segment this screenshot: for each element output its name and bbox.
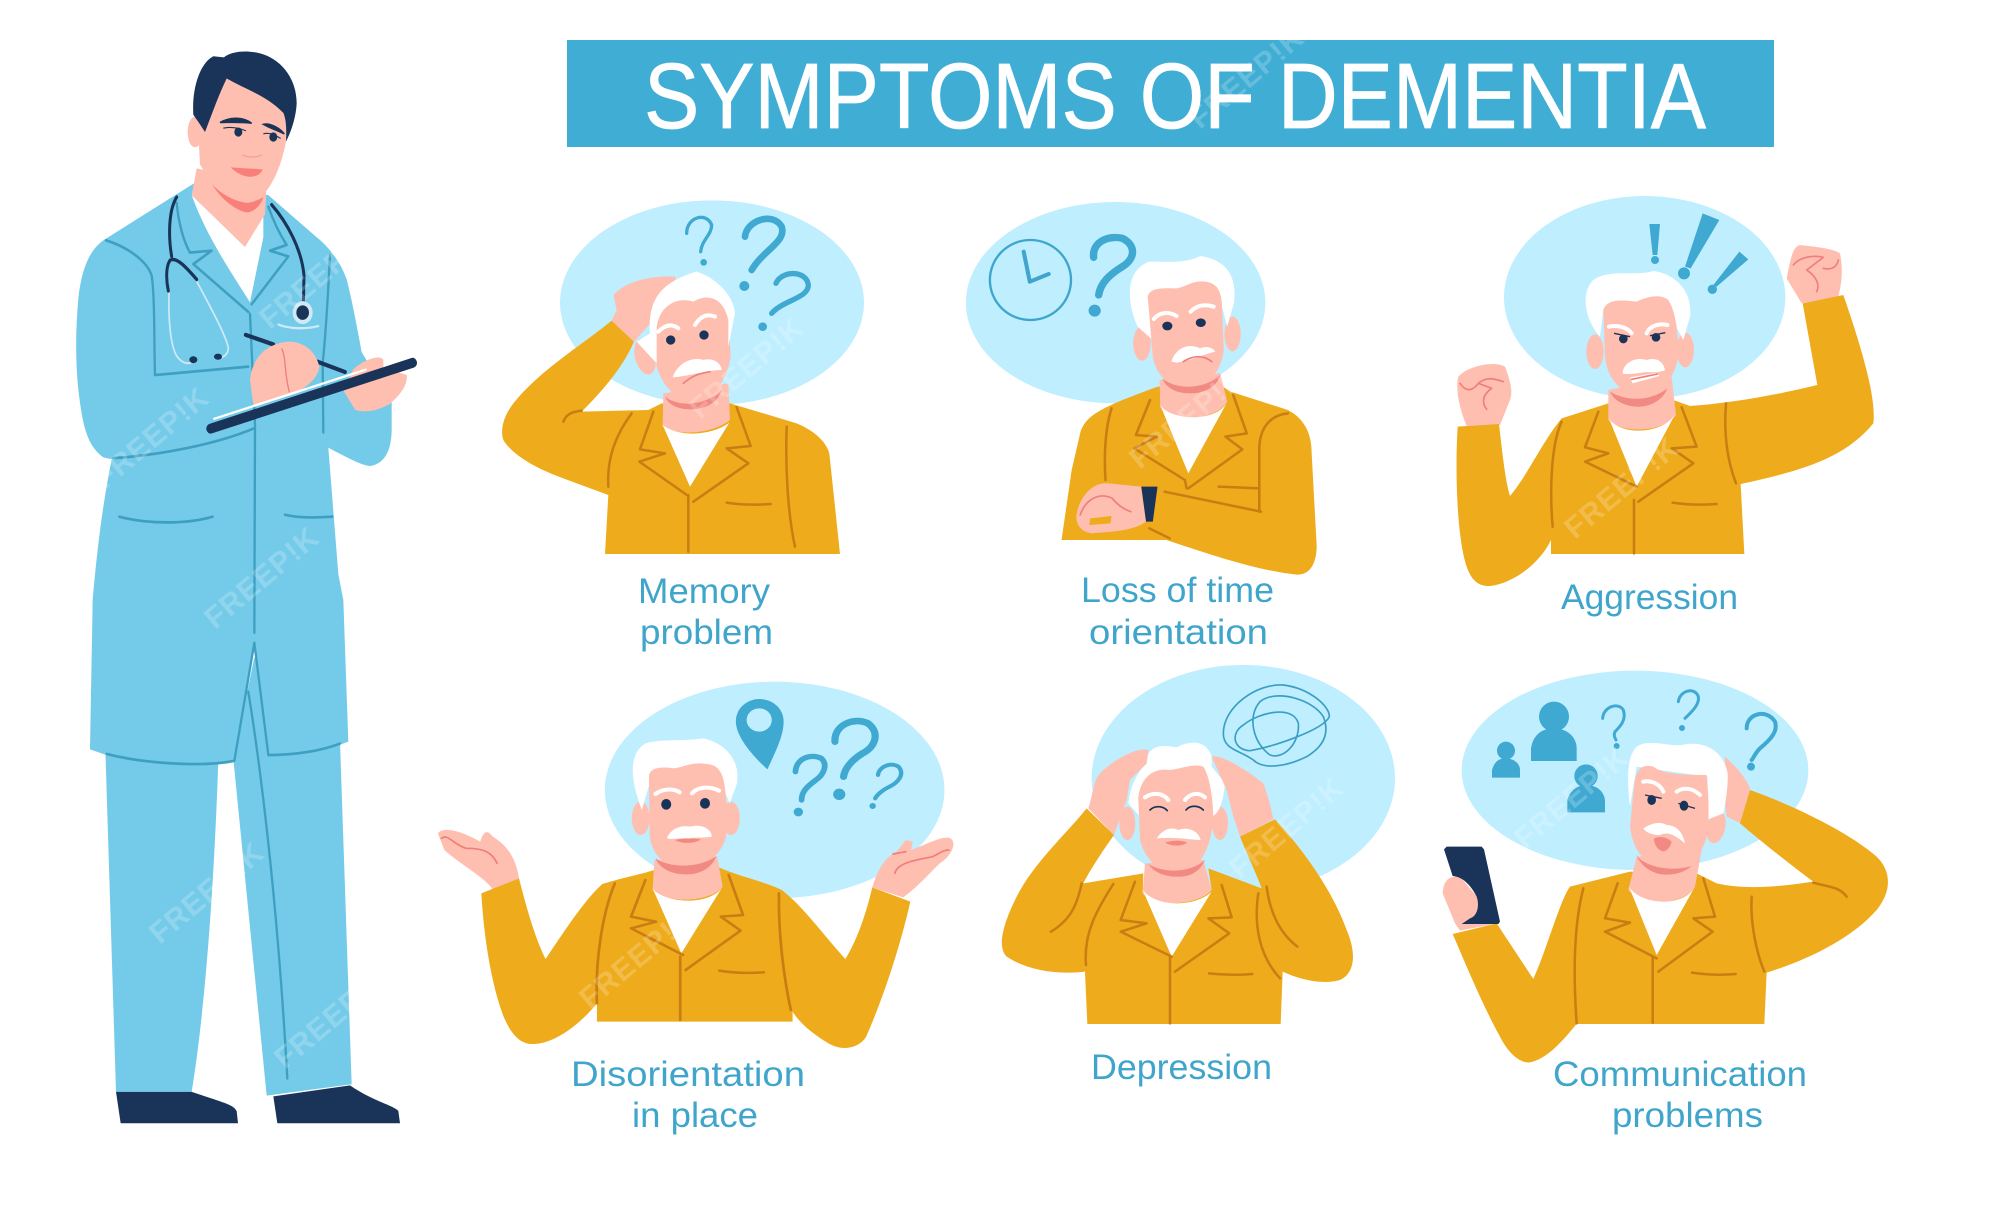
panel: depression xyxy=(1002,665,1395,1024)
question mark xyxy=(1089,237,1133,317)
open hands xyxy=(438,830,953,897)
jacket seams xyxy=(563,407,795,552)
head xyxy=(1119,743,1228,903)
panel: disorientation in place xyxy=(438,682,953,1048)
question marks xyxy=(1603,691,1776,771)
pen and clipboard xyxy=(211,335,413,429)
doctor coat seams xyxy=(106,203,340,1078)
watermarks: FREEP!K xyxy=(1183,21,1311,135)
doctor figure xyxy=(76,51,413,1123)
panel: aggression xyxy=(1457,196,1874,586)
jacket xyxy=(1062,385,1317,575)
watermarks: FREEP!K xyxy=(268,961,396,1075)
panel: loss of time orientation xyxy=(966,202,1317,575)
hand and watch xyxy=(1076,483,1158,533)
scribble xyxy=(1223,685,1329,766)
label: depression: Depression xyxy=(1091,1048,1272,1087)
exclamation marks xyxy=(1649,213,1748,294)
hand on head xyxy=(1725,757,1750,823)
hand on head xyxy=(612,276,680,342)
thought bubble xyxy=(605,682,944,898)
thought bubble xyxy=(1504,196,1785,399)
watermarks: FREEP!K xyxy=(1508,741,1636,855)
watermarks: FREEP!K xyxy=(1223,771,1351,885)
head xyxy=(1130,256,1241,473)
head xyxy=(631,272,735,487)
thought bubble xyxy=(560,200,864,405)
doctor head xyxy=(188,51,297,247)
title banner: SYMPTOMS OF DEMENTIA xyxy=(644,44,1706,148)
thought bubble xyxy=(966,202,1265,403)
fists xyxy=(1457,245,1842,426)
head xyxy=(632,738,740,953)
watermarks: FREEP!K xyxy=(253,221,381,335)
watermarks: FREEP!K xyxy=(88,381,216,495)
label: memory problem xyxy=(638,572,773,652)
doctor shirt xyxy=(192,195,263,302)
label: disorientation in place: Disorientation xyxy=(571,1055,805,1094)
watermarks: FREEP!K xyxy=(683,311,811,425)
label: communication problems xyxy=(1553,1055,1807,1135)
label: disorientation in place xyxy=(571,1055,805,1135)
question marks xyxy=(794,721,901,816)
watermarks: FREEP!K xyxy=(1558,431,1686,545)
jacket seams xyxy=(1051,882,1297,1023)
jacket xyxy=(481,867,910,1048)
question marks xyxy=(687,217,808,331)
jacket xyxy=(1002,808,1353,1024)
jacket seams xyxy=(1575,878,1847,1023)
thought bubble xyxy=(1092,665,1395,892)
panel: memory problem xyxy=(502,200,864,554)
people icons xyxy=(1492,702,1605,812)
jacket xyxy=(1453,790,1888,1063)
label: memory problem: Memory xyxy=(638,572,771,611)
shirt xyxy=(1143,890,1212,957)
label: loss of time orientation: Loss of time xyxy=(1081,571,1274,610)
panel: communication problems xyxy=(1443,671,1888,1063)
head xyxy=(1628,743,1729,955)
jacket seams xyxy=(597,875,791,1020)
location pin xyxy=(736,699,784,769)
watermarks: FREEP!K xyxy=(198,521,326,635)
label: communication problems: problems xyxy=(1612,1096,1763,1135)
watermarks xyxy=(88,21,1686,1075)
watermarks: FREEP!K xyxy=(573,901,701,1015)
label: disorientation in place: in place xyxy=(632,1096,758,1135)
label: loss of time orientation: orientation xyxy=(1089,613,1268,652)
thought bubble xyxy=(1462,671,1808,870)
phone and hand xyxy=(1443,847,1500,931)
watermarks: FREEP!K xyxy=(1123,361,1251,475)
jacket xyxy=(502,321,840,554)
label: communication problems: Communication xyxy=(1553,1055,1807,1094)
jacket seams xyxy=(1105,395,1288,538)
stethoscope xyxy=(167,197,318,363)
label: loss of time orientation xyxy=(1081,571,1274,652)
hands on head xyxy=(1088,749,1273,837)
clock icon xyxy=(990,240,1071,320)
jacket seams xyxy=(1551,403,1736,553)
head xyxy=(1586,271,1694,487)
watermarks: FREEP!K xyxy=(143,836,271,950)
label: memory problem: problem xyxy=(640,613,773,652)
label: aggression: Aggression xyxy=(1561,578,1738,617)
jacket xyxy=(1457,295,1874,586)
